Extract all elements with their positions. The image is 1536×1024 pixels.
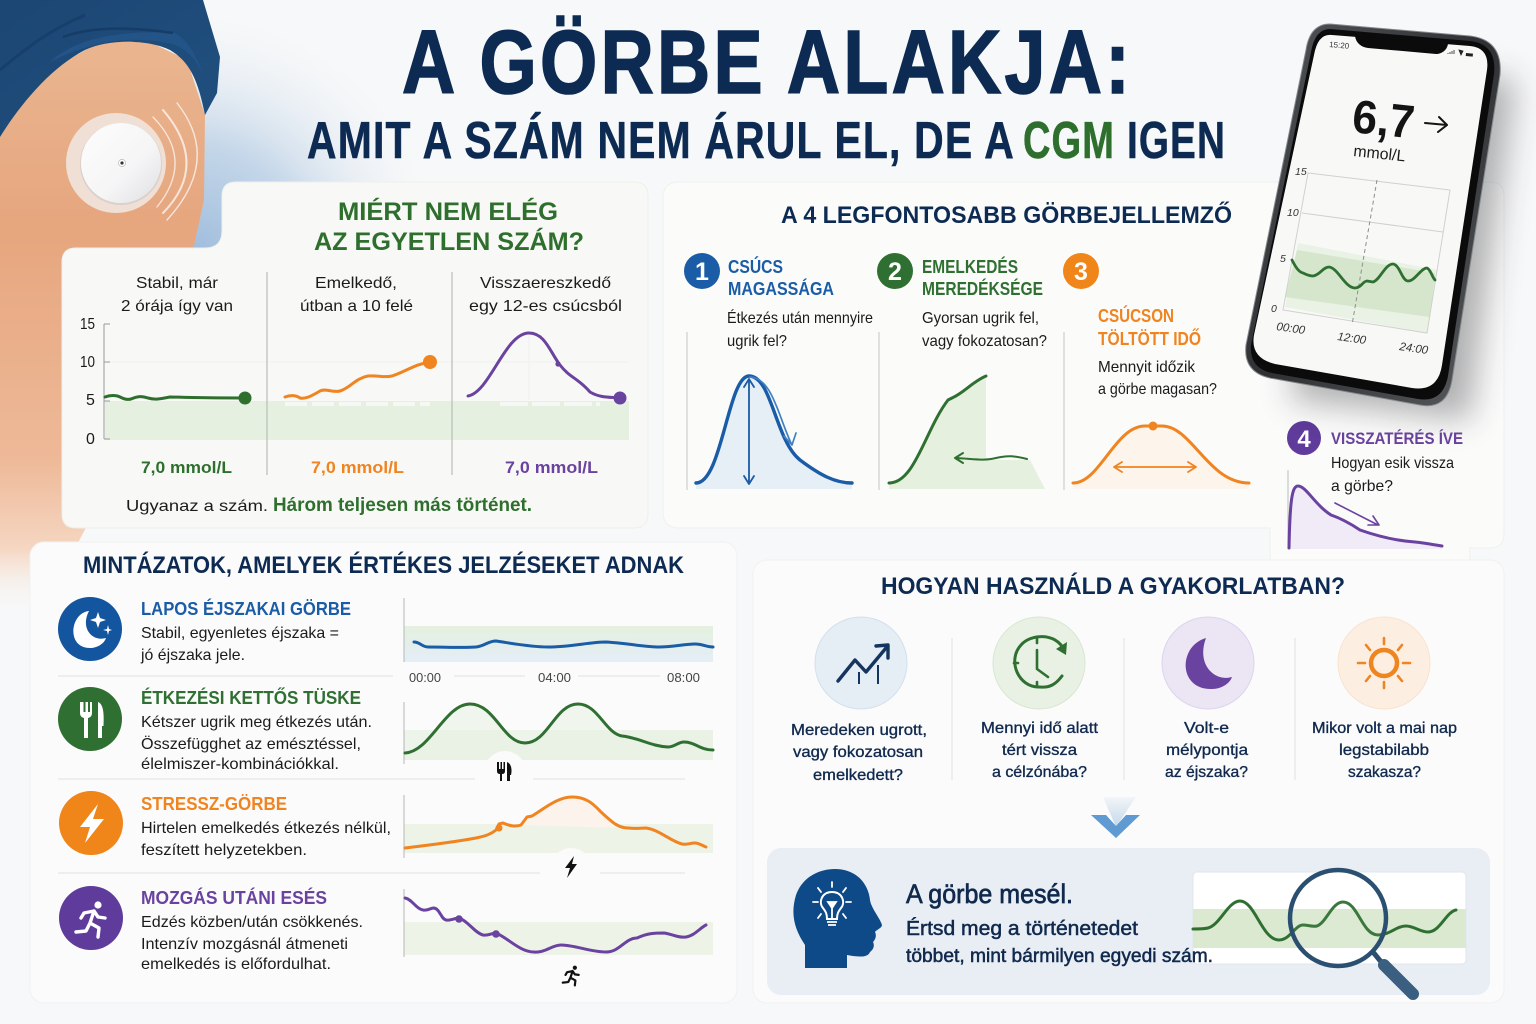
phone body [1246,24,1500,406]
feature 2: rise steepness: MEREDÉKSÉGE [922,278,1043,299]
feature 2: rise steepness: 2 [888,258,902,286]
question 1: emelkedett? [813,767,903,784]
values: 7,0 mmol/L [311,458,404,477]
chart: stress curve [404,795,713,888]
pattern row: flat night curve: jó éjszaka jele. [140,647,245,664]
column captions: Visszaereszkedő [480,275,611,292]
question 3: Volt-e [1184,720,1229,737]
subtitle: AMIT A SZÁM NEM ÁRUL EL, DE A [307,112,1015,170]
feature 1: peak height [684,253,873,490]
phone chart: 12:00 [1337,331,1367,347]
photo: arm with CGM sensor [0,0,220,615]
feature 1: peak height: ugrik fel? [727,333,787,350]
icon: sun [1338,617,1430,709]
panel: practice [753,560,1504,1003]
comparison line chart: 5 [86,392,95,409]
callout text: A görbe mesél. [906,879,1073,909]
question 2: tért vissza [1002,742,1077,759]
feature 3: time at peak: 3 [1074,258,1088,286]
column captions: egy 12-es csúcsból [469,298,622,315]
values [141,458,598,477]
phone chart: 10 [1287,207,1299,219]
feature 2: rise steepness: EMELKEDÉS [922,256,1018,277]
glucose reading [1350,89,1447,165]
pattern row: post-exercise drop: Intenzív mozgásnál átmeneti [141,936,348,953]
values: 7,0 mmol/L [505,458,598,477]
icon: rising chart [815,617,907,709]
phone chart [1271,166,1450,357]
feature 4: return arc: VISSZATÉRÉS ÍVE [1331,429,1463,448]
falling curve [468,333,626,404]
feature 4: return arc [1287,421,1463,549]
feature 4: return arc: Hogyan esik vissza [1331,455,1454,472]
feature 4: return arc: a görbe? [1331,478,1393,495]
callout text [906,879,1213,967]
column captions: útban a 10 felé [300,298,413,315]
chart: night curve: 04:00 [538,670,571,685]
glucose reading: mmol/L [1353,143,1406,165]
phone chart: 5 [1280,253,1286,265]
pattern row: post-exercise drop: Edzés közben/után csökkenés. [141,914,363,931]
comparison line chart: 15 [80,316,95,333]
icon: head with lightbulb [793,869,882,968]
values: 7,0 mmol/L [141,458,232,477]
sleeve [0,0,220,137]
chart: night curve [404,598,713,685]
chart: double spike [404,702,713,793]
feature 1: peak height: Étkezés után mennyire [727,308,873,327]
phone with CGM app [1246,24,1515,420]
status bar: 15:20 [1329,40,1350,51]
column captions [121,275,622,315]
chart: night curve: 08:00 [667,670,700,685]
heading: HOGYAN HASZNÁLD A GYAKORLATBAN? [881,572,1345,600]
icon: magnifier [1290,870,1413,994]
comparison line chart [80,272,629,475]
signal waves [153,103,197,220]
pattern row: stress curve: Hirtelen emelkedés étkezés nélkül, [141,820,391,837]
callout: the curve tells a story [767,848,1490,995]
status bar [1329,40,1473,57]
heading: A 4 LEGFONTOSABB GÖRBEJELLEMZŐ [781,201,1232,229]
panel: why a single number is not enough [62,182,648,528]
question 4 [1312,617,1457,781]
chart: exercise drop [404,889,713,985]
feature 4: return arc: 4 [1297,426,1311,453]
feature 1: peak height: 1 [695,258,709,286]
column captions: 2 órája így van [121,298,233,315]
pattern row: flat night curve: Stabil, egyenletes éjszaka = [141,625,339,642]
icon: crescent moon [1162,617,1254,709]
pattern row: post-exercise drop: MOZGÁS UTÁNI ESÉS [141,887,327,908]
feature 3: time at peak: a görbe magasan? [1098,381,1217,398]
screen [1253,35,1487,389]
pattern row: meal double spike: élelmiszer-kombinációkkal. [141,756,339,773]
rising curve [285,355,437,398]
feature 1: peak height: MAGASSÁGA [728,278,834,299]
sensor patch [66,113,166,213]
feature 3: time at peak: CSÚCSON [1098,305,1174,326]
pattern row: meal double spike: Összefügghet az emésztéssel, [141,735,361,753]
takeaway [126,495,532,516]
subtitle: CGM [1023,112,1115,170]
phone shadow [1290,60,1515,420]
column captions: Stabil, már [136,275,219,292]
phone chart: 24:00 [1398,341,1429,357]
phone chart: 0 [1271,303,1277,315]
pattern row: stress curve: feszített helyzetekben. [141,842,307,859]
heading: MIÉRT NEM ELÉG [338,197,558,226]
pattern row: meal double spike [58,687,713,793]
panel: patterns [30,542,737,1003]
question 1: vagy fokozatosan [793,744,923,761]
pattern row: post-exercise drop: emelkedés is előfordulhat. [141,956,331,973]
heading [314,197,584,256]
stable curve [105,392,252,404]
icon: lightning bolt [59,791,123,855]
takeaway: Ugyanaz a szám. [126,498,268,515]
feature 2: rise steepness: vagy fokozatosan? [922,333,1047,350]
callout text: többet, mint bármilyen egyedi szám. [906,946,1213,967]
callout text: Értsd meg a történetedet [906,917,1138,940]
feature 3: time at peak: TÖLTÖTT IDŐ [1098,328,1201,349]
pattern row: meal double spike: Kétszer ugrik meg étkezés után. [141,714,372,731]
pattern row: meal double spike: ÉTKEZÉSI KETTŐS TÜSKE [141,687,361,708]
feature 2: rise steepness [877,253,1047,490]
question 4: legstabilabb [1339,742,1429,759]
icon: fork and knife [58,687,122,751]
chart: night curve: 00:00 [409,670,441,685]
panel: 4 curve features [663,182,1504,560]
question 2: a célzónába? [992,764,1087,781]
question 2 [981,617,1099,781]
arm skin [0,42,205,615]
column captions: Emelkedő, [315,275,397,292]
phone chart: 00:00 [1276,321,1306,337]
subtitle: IGEN [1127,112,1226,170]
question 3: mélypontja [1166,742,1248,759]
title: A GÖRBE ALAKJA: [402,13,1133,113]
pattern row: stress curve [59,791,713,888]
comparison line chart: 10 [80,354,95,371]
feature 3: time at peak: Mennyit időzik [1098,359,1196,376]
question 1: Meredeken ugrott, [791,722,927,739]
pattern row: post-exercise drop [59,886,713,985]
glucose reading: 6,7 [1350,89,1417,148]
heading: AZ EGYETLEN SZÁM? [314,227,584,256]
question 3 [1162,617,1254,781]
pattern row: stress curve: STRESSZ-GÖRBE [141,794,287,814]
icon: moon and stars [58,597,122,661]
takeaway: Három teljesen más történet. [273,495,532,516]
question 4: Mikor volt a mai nap [1312,720,1457,737]
icon: runner [59,886,123,950]
pattern row: flat night curve: LAPOS ÉJSZAKAI GÖRBE [141,598,351,619]
feature 3: time at peak [1063,253,1249,490]
heading: MINTÁZATOK, AMELYEK ÉRTÉKES JELZÉSEKET ADNAK [83,551,685,579]
icon: clock [993,617,1085,709]
pattern row: flat night curve [58,597,713,685]
comparison line chart: 0 [86,431,95,448]
question 1 [791,617,927,784]
question 3: az éjszaka? [1165,764,1248,781]
phone chart: 15 [1295,166,1307,178]
question 4: szakasza? [1348,764,1421,781]
question 2: Mennyi idő alatt [981,720,1099,737]
feature 1: peak height: CSÚCS [728,256,783,277]
sensor disc [80,123,162,205]
feature 2: rise steepness: Gyorsan ugrik fel, [922,310,1039,327]
arrow: down chevron [1091,797,1140,838]
chart card [1193,872,1466,964]
notch [1355,36,1448,54]
